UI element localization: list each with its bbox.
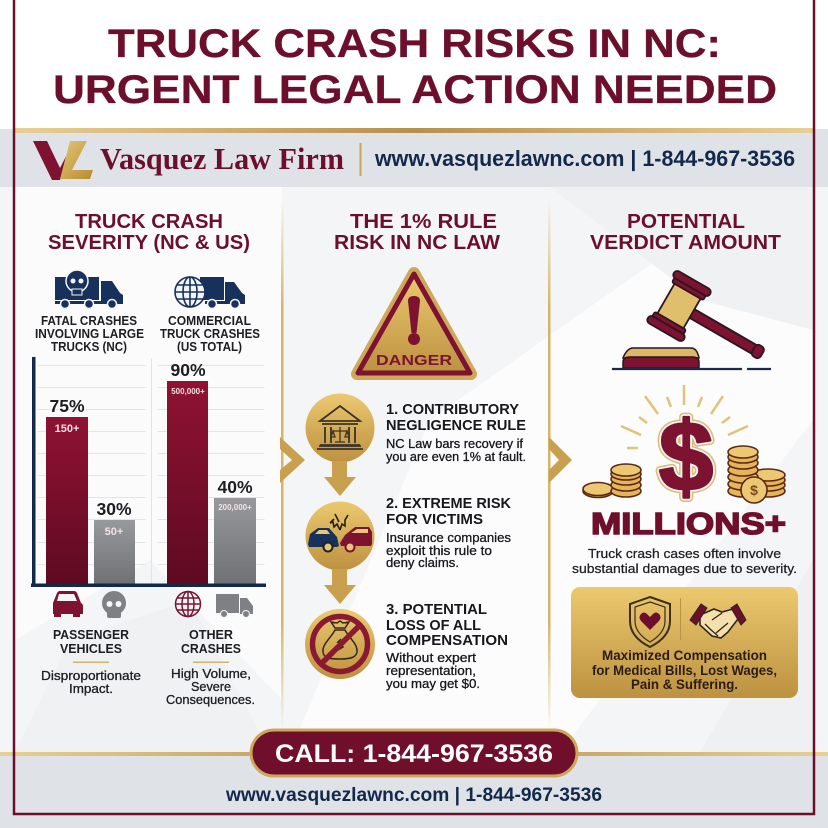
heading bbox=[48, 210, 250, 254]
category: other crashes: High Volume, bbox=[171, 667, 251, 681]
panel: truck crash severity bbox=[31, 210, 266, 707]
icon: car collision bbox=[306, 502, 374, 570]
callout: maximized compensation: Pain & Suffering. bbox=[631, 677, 738, 692]
title bbox=[53, 22, 777, 112]
category: passenger vehicles: Impact. bbox=[69, 682, 113, 696]
footer contact line: www.vasquezlawnc.com | 1-844-967-3536 bbox=[225, 785, 602, 806]
category: other crashes: OTHER bbox=[189, 627, 234, 642]
callout: maximized compensation bbox=[571, 587, 798, 698]
bar chart: 50+ bbox=[105, 526, 123, 538]
icon: truck with skull bbox=[55, 270, 123, 308]
category: other crashes: CRASHES bbox=[181, 641, 241, 656]
description text: substantial damages due to severity. bbox=[572, 561, 797, 576]
icon: dollar sign with coins bbox=[583, 385, 785, 511]
icon: skull bbox=[102, 591, 126, 618]
arrow: chevron to middle panel bbox=[280, 437, 305, 483]
step 1 text: you are even 1% at fault. bbox=[386, 450, 526, 464]
step 2 text: Insurance companies bbox=[386, 531, 511, 545]
icon: globe bbox=[176, 592, 200, 616]
heading: POTENTIAL bbox=[627, 210, 745, 233]
chart labels: INVOLVING LARGE bbox=[35, 327, 144, 341]
bar chart: 200,000+ bbox=[218, 503, 252, 512]
icon: right coin stacks: $ bbox=[750, 482, 758, 498]
step 2 text: FOR VICTIMS bbox=[386, 511, 483, 528]
arrow: step 1 to 2 bbox=[324, 461, 356, 496]
heading: TRUCK CRASH bbox=[75, 210, 223, 233]
icon: VL logo bbox=[33, 141, 93, 180]
heading: SEVERITY (NC & US) bbox=[48, 231, 250, 254]
step 3 text: LOSS OF ALL bbox=[386, 617, 481, 634]
category: other crashes bbox=[166, 627, 255, 707]
heading bbox=[590, 210, 781, 254]
step 3 text: Without expert bbox=[386, 651, 477, 665]
icon: car bbox=[53, 591, 83, 617]
step 2 text: exploit this rule to bbox=[386, 544, 492, 558]
bar chart bbox=[31, 357, 266, 587]
footer band bbox=[0, 730, 828, 828]
title: URGENT LEGAL ACTION NEEDED bbox=[53, 68, 777, 112]
category: passenger vehicles bbox=[41, 627, 141, 696]
bar chart: 40% bbox=[217, 477, 253, 497]
heading: RISK IN NC LAW bbox=[334, 231, 501, 254]
panel: the 1% rule bbox=[305, 210, 526, 691]
icon: grey truck bbox=[216, 594, 253, 618]
header band bbox=[0, 128, 828, 187]
arrow: step 2 to 3 bbox=[324, 569, 356, 604]
description text: Truck crash cases often involve bbox=[588, 546, 781, 561]
chart labels: COMMERCIAL bbox=[168, 314, 251, 328]
step 1 text bbox=[386, 401, 526, 464]
icon: danger triangle: DANGER bbox=[376, 352, 452, 369]
icon: handshake bbox=[690, 604, 746, 638]
big number: millions: MILLIONS+ bbox=[591, 507, 786, 541]
icon: courthouse scales bbox=[306, 394, 374, 462]
chart labels: FATAL CRASHES bbox=[41, 314, 137, 328]
panel: potential verdict amount bbox=[571, 210, 798, 698]
chart labels bbox=[35, 314, 260, 354]
bar chart: 90% bbox=[170, 360, 206, 380]
bar chart: 75% bbox=[49, 396, 85, 416]
step 2 text bbox=[386, 495, 511, 570]
icon: left coin stacks bbox=[583, 464, 641, 498]
category: passenger vehicles: Disproportionate bbox=[41, 669, 141, 683]
icon: dollar sign with coins: $ bbox=[659, 401, 713, 511]
chart labels: TRUCKS (NC) bbox=[51, 340, 127, 354]
arrow: chevron to right panel bbox=[549, 437, 572, 483]
heading: VERDICT AMOUNT bbox=[590, 231, 781, 254]
step 2 text: deny claims. bbox=[386, 556, 459, 570]
column dividers bbox=[281, 200, 550, 730]
heading: THE 1% RULE bbox=[350, 210, 497, 233]
category: other crashes: Severe bbox=[191, 680, 231, 694]
bar chart: 150+ bbox=[55, 423, 79, 435]
step 3 text bbox=[386, 601, 508, 691]
call button bbox=[251, 730, 577, 776]
icon: truck with globe bbox=[175, 277, 245, 308]
callout: maximized compensation: Maximized Compensation bbox=[602, 648, 767, 663]
bar chart: 500,000+ bbox=[171, 387, 205, 396]
icon: right coin stacks bbox=[728, 446, 785, 503]
icon: gavel bbox=[612, 270, 777, 380]
step 1 text: NEGLIGENCE RULE bbox=[386, 417, 526, 434]
icon: dollar sign with coins: $ bbox=[659, 401, 713, 511]
title: TRUCK CRASH RISKS IN NC: bbox=[108, 22, 721, 66]
icon: dollar sign with coins: $ bbox=[659, 401, 713, 511]
firm name: Vasquez Law Firm bbox=[100, 141, 344, 176]
bar chart: 30% bbox=[96, 499, 132, 519]
category: passenger vehicles: PASSENGER bbox=[53, 627, 130, 642]
step 3 text: 3. POTENTIAL bbox=[386, 601, 487, 618]
chart labels: (US TOTAL) bbox=[177, 340, 242, 354]
icon: danger triangle bbox=[357, 273, 471, 374]
step 1 text: NC Law bars recovery if bbox=[386, 437, 524, 451]
category: other crashes: Consequences. bbox=[166, 693, 255, 707]
step 3 text: COMPENSATION bbox=[386, 632, 508, 649]
step 1 text: 1. CONTRIBUTORY bbox=[386, 401, 519, 418]
step 3 text: representation, bbox=[386, 664, 476, 678]
step 2 text: 2. EXTREME RISK bbox=[386, 495, 511, 512]
callout: maximized compensation: for Medical Bills, Lost Wages, bbox=[592, 663, 777, 678]
icon: no money bag bbox=[305, 609, 375, 679]
heading bbox=[334, 210, 501, 254]
category: passenger vehicles: VEHICLES bbox=[60, 641, 122, 656]
step 3 text: you may get $0. bbox=[386, 677, 480, 691]
call button: CALL: 1-844-967-3536 bbox=[275, 740, 553, 768]
description text bbox=[572, 546, 797, 576]
icon: shield heart bbox=[630, 597, 670, 647]
contact line: www.vasquezlawnc.com | 1-844-967-3536 bbox=[374, 146, 795, 171]
chart labels: TRUCK CRASHES bbox=[160, 327, 260, 341]
